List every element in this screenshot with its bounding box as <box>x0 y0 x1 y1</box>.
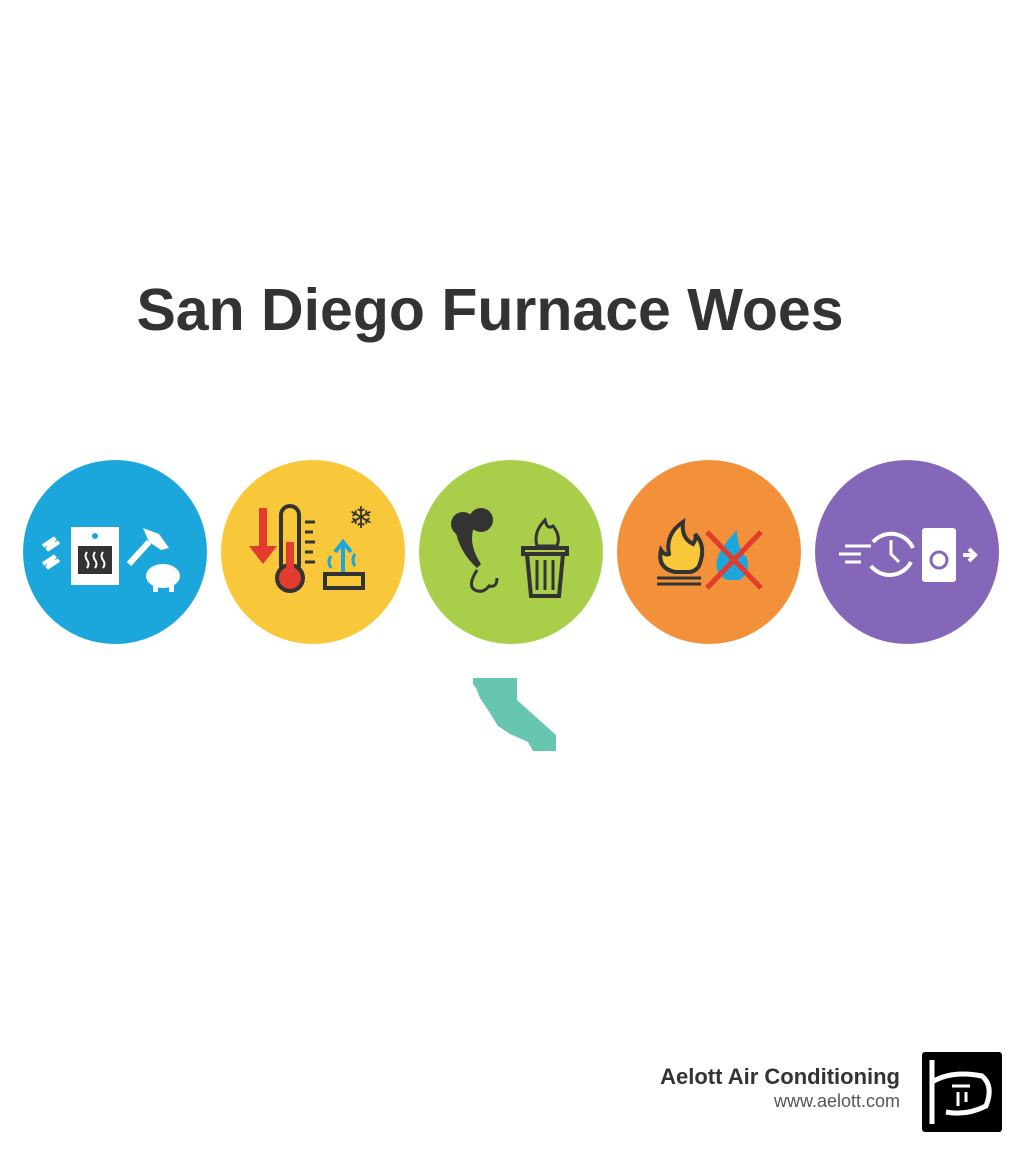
icon: orange circle flame <box>617 460 801 644</box>
icon: california map <box>473 678 556 751</box>
title: San Diego Furnace Woes <box>136 277 844 343</box>
icon: green circle smell <box>419 460 603 644</box>
icon: blue circle noisy furnace <box>23 460 207 644</box>
logo <box>922 1052 1002 1132</box>
icon: yellow circle temperature <box>221 460 405 644</box>
brand name: www.aelott.com <box>774 1091 900 1111</box>
brand name: Aelott Air Conditioning <box>660 1064 900 1089</box>
brand name <box>660 1064 900 1111</box>
icon: purple circle timer <box>815 460 999 644</box>
icon: yellow circle temperature: ❄ <box>348 501 374 536</box>
